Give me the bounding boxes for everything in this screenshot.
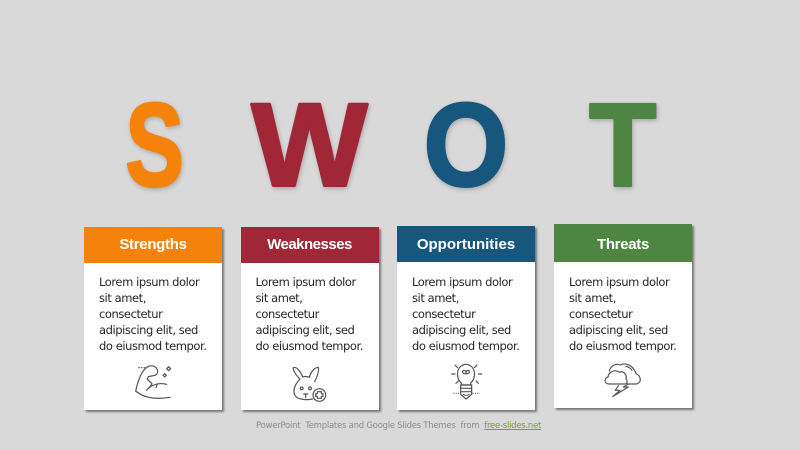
heading: threats: Threats [597, 236, 649, 253]
heading: threats [554, 224, 692, 262]
icon: flexed arm [135, 365, 172, 399]
icon: rabbit [292, 366, 326, 402]
text: opportunities [412, 274, 519, 353]
footer credit: PowerPoint Templates and Google Slides Themes from free-slides.net [256, 421, 541, 431]
text: weaknesses: adipiscing elit, sed [256, 323, 354, 337]
heading: strengths: Strengths [119, 236, 187, 253]
text: threats: sit amet, [569, 291, 616, 305]
text: strengths: do eiusmod tempor. [99, 339, 206, 353]
panel: weaknesses [240, 227, 378, 410]
text: weaknesses [256, 274, 363, 353]
text: weaknesses: Lorem ipsum dolor [256, 274, 356, 288]
text: strengths: sit amet, [99, 291, 146, 305]
heading: strengths [84, 227, 222, 263]
heading: weaknesses: Weaknesses [267, 236, 352, 253]
letter W: W [252, 79, 368, 211]
heading: weaknesses [240, 227, 378, 263]
icon: storm cloud [604, 363, 641, 398]
text: weaknesses: do eiusmod tempor. [256, 339, 363, 353]
text: threats: consectetur [569, 307, 632, 321]
text: strengths: adipiscing elit, sed [99, 323, 198, 337]
letter S: S [126, 79, 184, 211]
SWOT letters [126, 79, 660, 212]
heading: opportunities [397, 226, 535, 262]
letter T: T [589, 80, 656, 211]
text: threats [569, 274, 676, 353]
text: threats: do eiusmod tempor. [569, 339, 676, 353]
text: threats: adipiscing elit, sed [569, 323, 668, 337]
letter O: O [424, 79, 508, 212]
text: opportunities: Lorem ipsum dolor [412, 274, 512, 288]
panel: threats [554, 224, 692, 408]
text: weaknesses: consectetur [256, 307, 319, 321]
text: opportunities: adipiscing elit, sed [412, 323, 511, 337]
text: opportunities: consectetur [412, 307, 475, 321]
icon: light bulb [451, 364, 482, 400]
text: threats: Lorem ipsum dolor [569, 274, 669, 288]
text: opportunities: do eiusmod tempor. [412, 339, 519, 353]
text: strengths: Lorem ipsum dolor [99, 274, 199, 288]
text: opportunities: sit amet, [412, 291, 459, 305]
text: strengths [99, 274, 206, 353]
text: weaknesses: sit amet, [256, 291, 302, 305]
panel: strengths [84, 227, 222, 410]
heading: opportunities: Opportunities [417, 236, 515, 253]
text: strengths: consectetur [99, 307, 162, 321]
panel: opportunities [397, 226, 535, 410]
